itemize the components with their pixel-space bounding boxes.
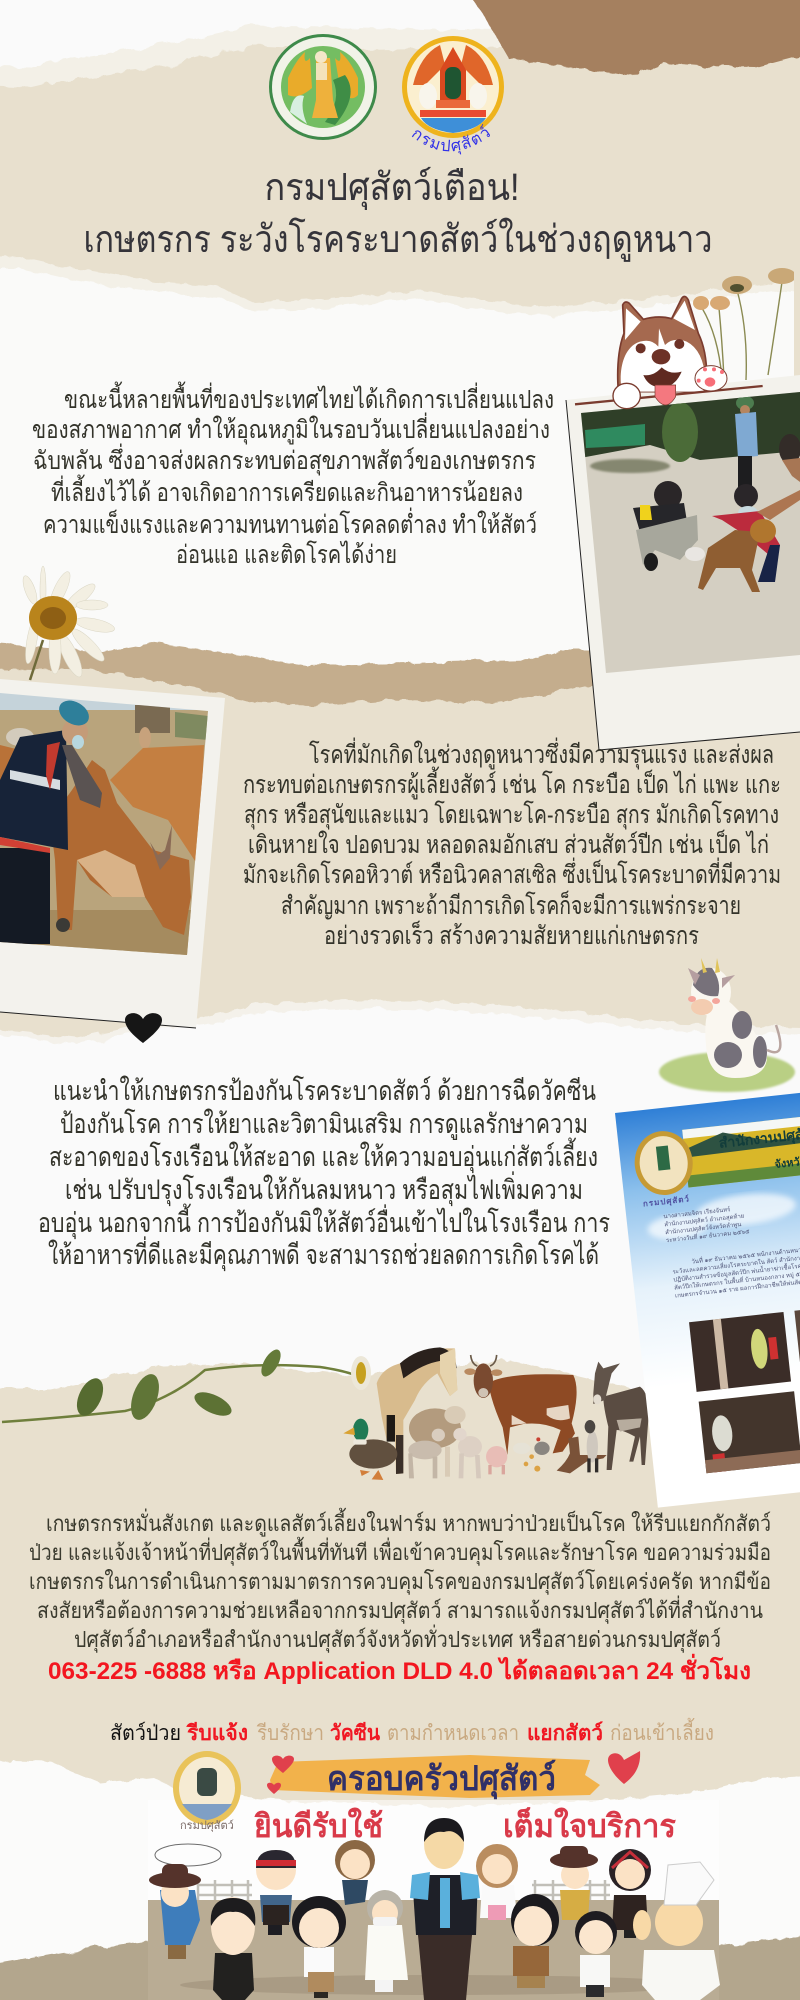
text block: document body [663,1196,800,1300]
animal: hens and chicks [513,1437,550,1472]
photo: disinfecting barn 1 [689,1312,791,1392]
logo: seal in document [631,1128,696,1198]
slogan: รีบรักษา [256,1722,324,1745]
logo figure [656,1145,670,1171]
text block: prevention paragraph: เช่น ปรับปรุงโรงเรือนให้กันลมหนาว หรือสุมไฟเพิ่มความ [65,1171,583,1207]
animal: lambs [408,1428,482,1478]
character: woman in khaki uniform [511,1894,559,1988]
animal: sheep [409,1406,466,1477]
icon: black heart [125,1013,162,1043]
logo: department seal small: กรมปศุสัตว์ [180,1819,234,1832]
torn paper: second white soft edge [0,1000,800,1120]
icon: hearts [267,1751,640,1794]
text block: prevention paragraph: สะอาดของโรงเรือนให้สะอาด และให้ความอบอุ่นแก่สัตว์เลี้ยง [49,1137,598,1174]
heading: welcome right: เต็มใจบริการ [503,1806,676,1844]
banner: office header photo [682,1104,800,1188]
character: cowgirl [149,1844,221,1959]
text block: diseases paragraph: อย่างรวดเร็ว สร้างความสัยหายแก่เกษตรกร [324,920,699,950]
panel: top right polaroid [566,375,800,750]
decoration: leafy branch with daisy [2,1347,371,1424]
heading: welcome left: ยินดีรับใช้ [254,1807,383,1844]
illustration: dog peeking [575,297,763,409]
animal: fawn [557,1437,607,1473]
text block: prevention paragraph [38,1075,610,1272]
animal: young goat [585,1420,598,1472]
logo: ministry of agriculture seal [269,34,377,140]
animal: duck [343,1419,397,1480]
text block: document body: ระหว่างวันที่ ๑๙ ธันวาคม ๒๕๖๕ [666,1227,750,1244]
character: chef thumbs up [633,1862,720,2000]
character: boy in white [575,1911,617,1997]
logo: department seal small [173,1751,241,1832]
text block: advice paragraph [29,1508,771,1653]
character: director in vest [410,1818,480,2000]
torn paper: main white section [0,268,800,700]
text block: advice paragraph: ปศุสัตว์อำเภอหรือสำนักงานปศุสัตว์จังหวัดทั่วประเทศ หรือสายด่วนกรมปศุสัตว์ [74,1624,721,1653]
title: กรมปศุสัตว์เตือน! [264,166,520,210]
torn paper: second white section [0,1009,800,1395]
character: woman jumping [335,1840,375,1905]
illustration: group of farm animals [343,1347,649,1480]
character: girl with red headband [609,1849,651,1938]
logo label: กรมปศุสัตว์ [642,1193,690,1209]
text block: intro paragraph: ขณะนี้หลายพื้นที่ของประเทศไทยได้เกิดการเปลี่ยนแปลง [64,381,554,414]
banner: family title: ครอบครัวปศุสัตว์ [327,1759,556,1800]
text block: intro paragraph: อ่อนแอ และติดโรคได้ง่าย [176,540,397,569]
torn paper: lower tan strip [0,640,620,705]
torn paper: bottom tan ground [0,1933,800,2000]
torn paper: top soft edge [0,0,520,88]
text block: document body: สำนักงานปศุสัตว์ อำเภอสุดท้าย [664,1212,745,1228]
torn paper: top white [0,0,520,68]
text block: prevention paragraph: ป้องกันโรค การให้ยาและวิตามินเสริม การดูแลรักษาความ [60,1108,588,1140]
animal: horse [377,1347,457,1474]
logo: department of livestock seal [402,36,504,138]
decoration: daisy flower [20,566,116,680]
text block: document body: สำนักงานปศุสัตว์จังหวัดลำพูน [665,1220,742,1236]
torn paper: bottom white section [0,1760,800,1967]
decoration: fences [198,1880,610,1900]
character: cowboy with moustache [550,1846,598,1920]
logo inner [637,1134,690,1192]
character: man in black uniform [211,1897,255,2000]
illustration: cow on grass [659,958,795,1092]
text block: intro paragraph [32,381,554,569]
animal: donkey [593,1362,649,1470]
character: man with headband [256,1850,296,1935]
slogan: ก่อนเข้าเลี้ยง [610,1718,714,1745]
panel: rotated press release document [615,1081,800,1508]
slogan: วัคซีน [330,1721,381,1745]
slogan: แยกสัตว์ [527,1721,603,1745]
decoration: dried flowers [693,268,796,380]
character: woman in white shirt [292,1896,346,1998]
slogan [110,1718,714,1745]
text block: document body: นางสาวสมจิตร เรียงจันทร์ [663,1205,731,1220]
text block: prevention paragraph: แนะนำให้เกษตรกรป้องกันโรคระบาดสัตว์ ด้วยการฉีดวัคซีน [53,1075,596,1106]
animal: pig [486,1446,507,1474]
title [84,166,712,262]
hotline text: 063-225 -6888 หรือ Application DLD 4.0 ได้ตลอดเวลา 24 ชั่วโมง [48,1653,751,1685]
torn paper: main white soft edge [0,257,800,400]
text block: diseases paragraph [243,737,781,950]
text block: prevention paragraph: อบอุ่น นอกจากนี้ การป้องกันมิให้สัตว์อื่นเข้าไปในโรงเรือน การ [38,1203,610,1240]
panel: left polaroid [0,679,225,1028]
text block: intro paragraph: ที่เลี้ยงไว้ได้ อาจเกิดอาการเครียดและกินอาหารน้อยลง [51,474,523,507]
torn paper: top right brown [459,0,800,77]
slogan: รีบแจ้ง [185,1721,248,1745]
text block: intro paragraph: ฉับพลัน ซึ่งอาจส่งผลกระทบต่อสุขภาพสัตว์ของเกษตรกร [33,443,536,476]
photo: vets with dog [581,392,800,673]
photo: disinfecting barn 3 [699,1391,800,1473]
photo: officer with cattle [0,690,215,960]
photo: disinfecting barn 2 [794,1300,800,1380]
character: old doctor [365,1890,408,1992]
decoration: beige strip at right edge [794,272,800,382]
logo label: curved department name: กรมปศุสัตว์ [412,124,490,154]
banner: family title [270,1755,600,1800]
text block: prevention paragraph: ให้อาหารที่ดีและมีคุณภาพดี จะสามารถช่วยลดการเกิดโรคได้ [48,1236,599,1272]
panel: livestock family cartoon [148,1751,720,2000]
slogan: สัตว์ป่วย [110,1721,181,1745]
character: woman in white blouse [476,1844,518,1920]
text block: intro paragraph: ความแข็งแรงและความทนทานต่อโรคลดต่ำลง ทำให้สัตว์ [43,507,537,539]
text block: intro paragraph: ของสภาพอากาศ ทำให้อุณหภูมิในรอบวันเปลี่ยนแปลงอย่าง [32,412,550,445]
slogan: ตามกำหนดเวลา [387,1722,519,1745]
animal: cow [464,1355,577,1455]
